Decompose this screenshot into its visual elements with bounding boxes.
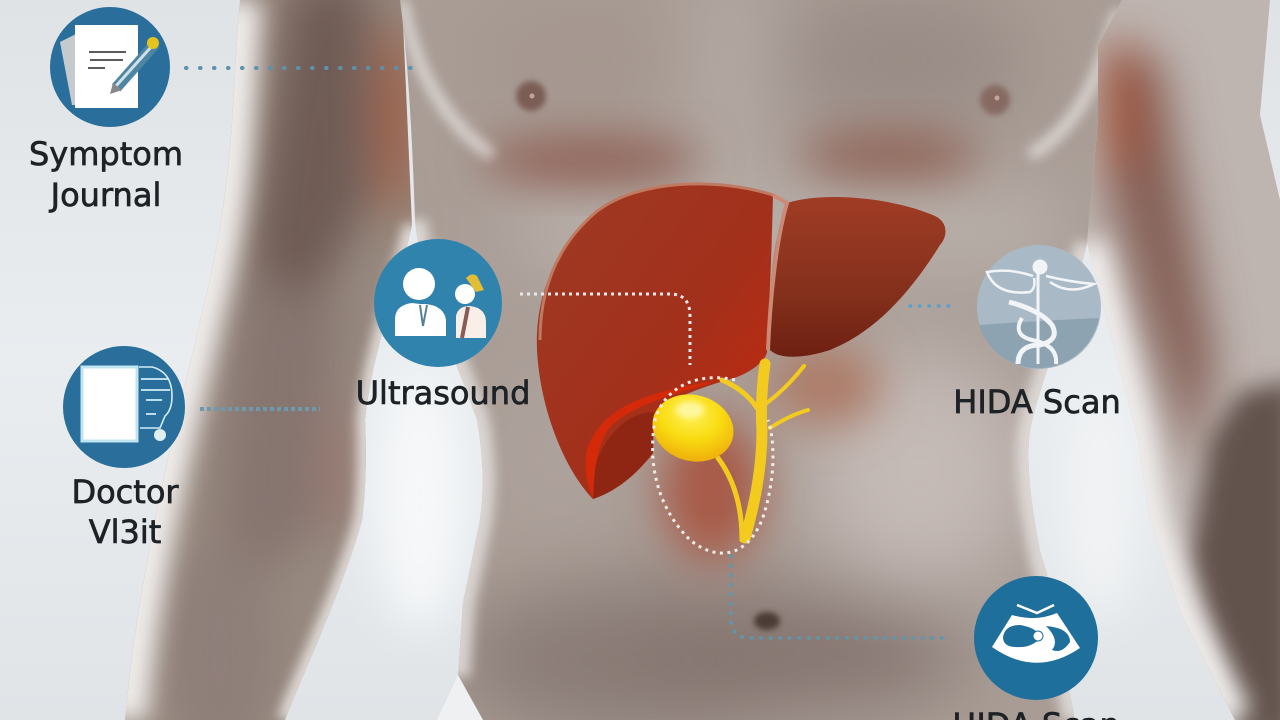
- label: Doctor Visit: Doctor: [71, 473, 179, 511]
- dashed outline around gallbladder: [653, 378, 773, 553]
- label: Ultrasound: Ultrasound: [356, 374, 530, 412]
- gap highlights: [375, 370, 1140, 630]
- right arm: [1080, 0, 1280, 720]
- connector: symptom journal: [186, 66, 415, 70]
- Ultrasound connector: [520, 294, 690, 365]
- skin glow around organs: [662, 345, 880, 562]
- label: Doctor Visit: [71, 473, 179, 551]
- icon: doctor visit: [63, 346, 185, 468]
- icon: caduceus HIDA scan: [977, 245, 1101, 369]
- left lobe: [537, 184, 773, 499]
- left lobe rim: [540, 184, 773, 340]
- left arm: [125, 0, 412, 720]
- red underside: [586, 381, 717, 499]
- icon: symptom journal: [50, 7, 170, 127]
- icon: ultrasound: [374, 239, 502, 367]
- gallbladder: [645, 386, 741, 470]
- torso: [395, 0, 1135, 720]
- torso rim light: [402, 0, 1118, 720]
- bile ducts: [718, 364, 808, 540]
- connector: lower HIDA scan: [731, 556, 948, 638]
- icon: ultrasound scan: [974, 576, 1098, 700]
- right lobe: [770, 197, 945, 357]
- liver: [537, 184, 945, 499]
- label: Doctor Visit: Vl3it: [89, 513, 161, 551]
- falciform ligament: [768, 195, 787, 350]
- label: HIDA Scan: HIDA Scan: [953, 383, 1121, 421]
- label: Symptom Journal: Journal: [49, 176, 161, 214]
- gallbladder highlight: [676, 402, 704, 418]
- navel: [754, 612, 780, 630]
- connector: HIDA scan: [910, 304, 955, 308]
- nipples: [516, 81, 1010, 115]
- label: Symptom Journal: [29, 135, 183, 214]
- triangular highlight at bottom: [437, 675, 483, 720]
- connector: doctor visit: [200, 407, 320, 411]
- label: Symptom Journal: Symptom: [29, 135, 183, 173]
